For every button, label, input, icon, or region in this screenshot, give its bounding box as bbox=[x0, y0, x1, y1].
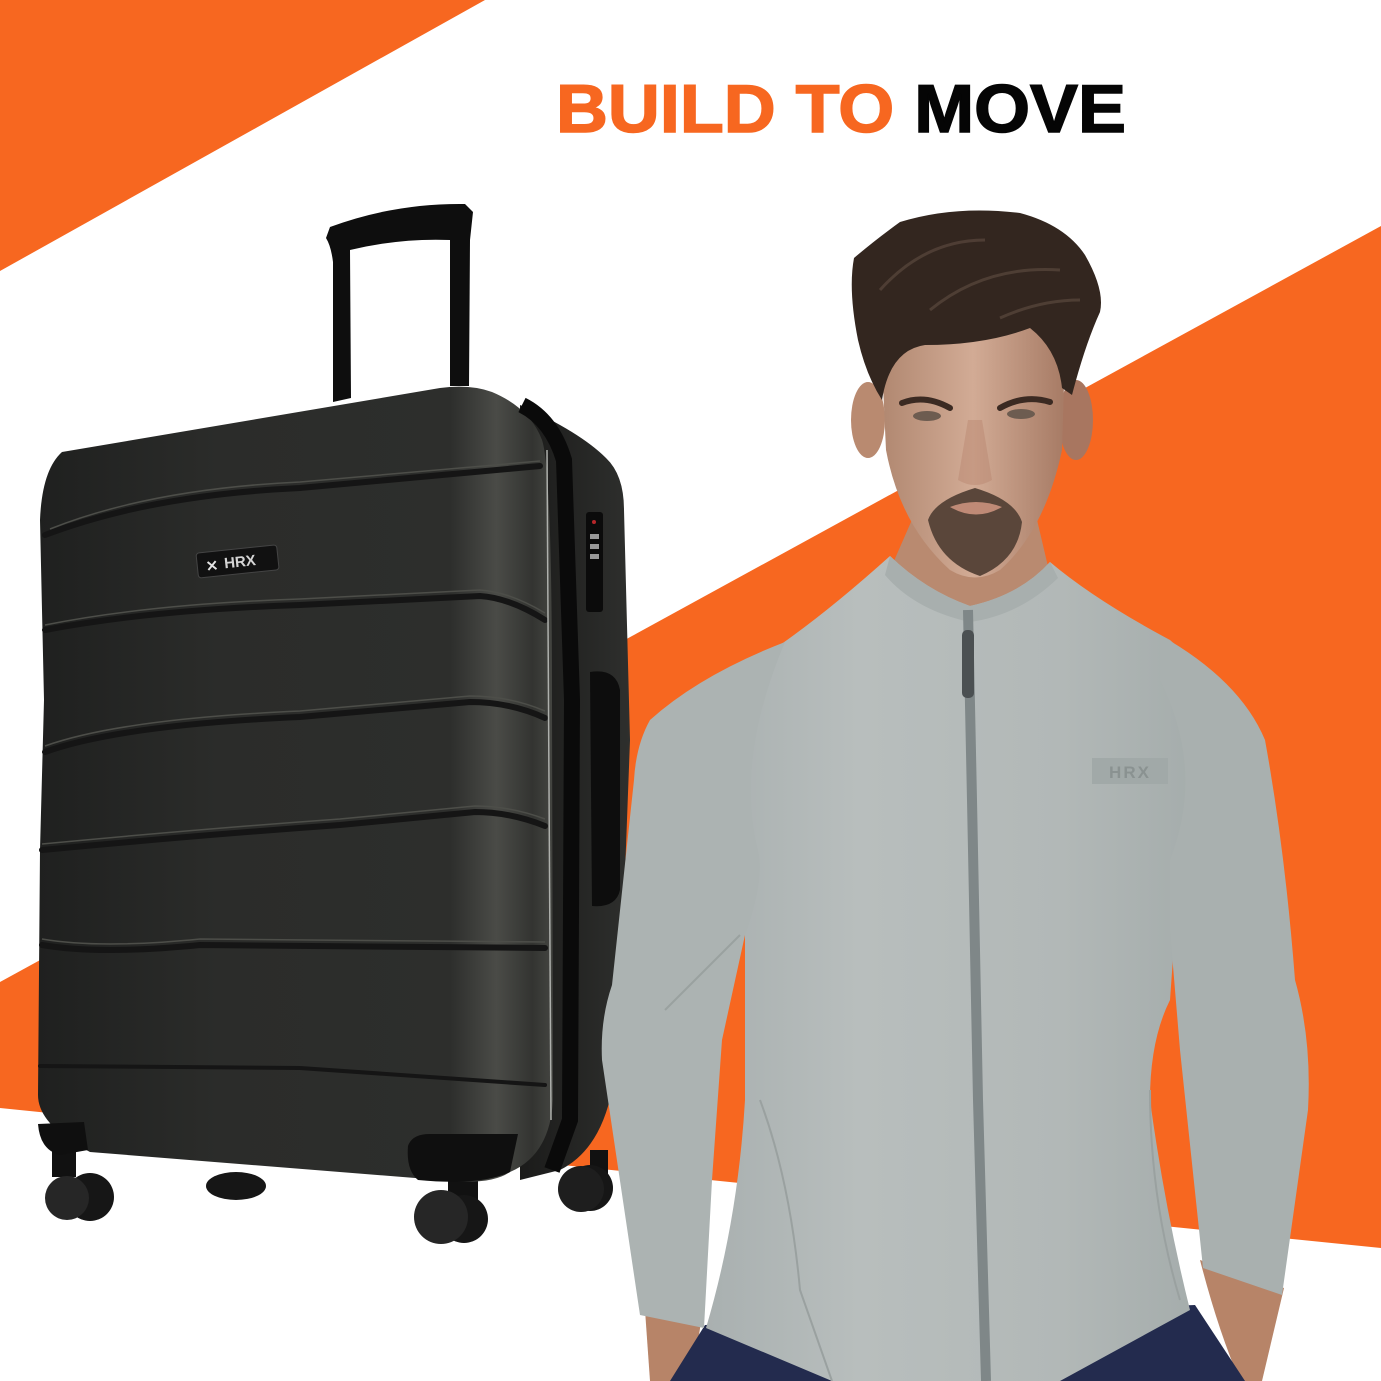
collar bbox=[885, 556, 1058, 622]
beard and moustache bbox=[928, 488, 1022, 576]
suitcase bbox=[38, 204, 630, 1244]
wheel housings bbox=[408, 1134, 518, 1182]
chest logo bbox=[1092, 758, 1168, 784]
nose shadow bbox=[958, 420, 992, 485]
zipper edge bbox=[522, 405, 572, 1170]
logo badge: × bbox=[204, 555, 220, 575]
navy trousers bbox=[670, 1305, 1245, 1381]
rear shell bbox=[520, 405, 630, 1180]
logo badge bbox=[196, 545, 279, 578]
jacket right sleeve bbox=[1160, 635, 1309, 1295]
eyes bbox=[902, 399, 1050, 408]
zipper pull bbox=[962, 630, 974, 698]
jacket torso bbox=[706, 556, 1215, 1381]
face bbox=[851, 320, 1093, 578]
hair highlights bbox=[880, 240, 1080, 318]
zipper bbox=[968, 610, 986, 1381]
logo badge: HRX bbox=[223, 552, 257, 572]
title: BUILD TO MOVE bbox=[556, 71, 1126, 147]
wheels bbox=[45, 1145, 613, 1244]
neck bbox=[890, 490, 1050, 625]
jacket left sleeve bbox=[602, 642, 785, 1328]
side carry handle bbox=[590, 671, 620, 906]
chest logo: HRX bbox=[1109, 763, 1151, 782]
combination lock bbox=[586, 512, 603, 612]
person bbox=[602, 210, 1309, 1381]
orange triangle: top left bbox=[0, 0, 485, 271]
hair bbox=[852, 210, 1101, 400]
orange diagonal band bbox=[0, 226, 1381, 1248]
hands and wrists bbox=[645, 1260, 1284, 1381]
sleeve seams bbox=[665, 935, 1180, 1381]
front shell bbox=[38, 387, 553, 1182]
shell ridges bbox=[40, 466, 545, 1085]
telescopic handle bbox=[326, 204, 473, 402]
